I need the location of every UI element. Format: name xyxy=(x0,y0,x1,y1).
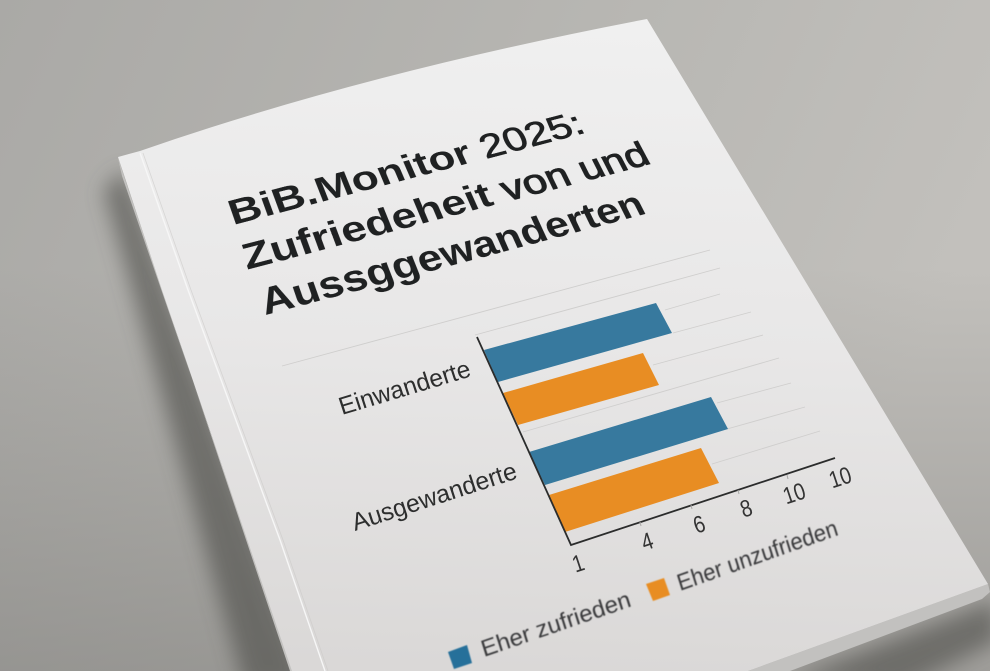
legend text: Eher zufrieden: Eher zufrieden xyxy=(478,585,634,662)
bar: Einwanderte eher unzufrieden xyxy=(503,353,659,425)
x axis tick labels: 4 xyxy=(638,527,657,556)
chart xyxy=(282,250,855,578)
x axis tick marks xyxy=(640,475,788,526)
title: BiB.Monitor 2025: xyxy=(219,109,602,225)
legend swatch: blue xyxy=(448,645,472,669)
x axis tick labels: 10 xyxy=(825,461,855,494)
title: Aussggewanderten xyxy=(241,184,640,301)
legend text: Eher unzufrieden: Eher unzufrieden xyxy=(674,514,841,596)
title: Zufriedeheit von und xyxy=(228,138,660,264)
x axis tick labels: 6 xyxy=(690,510,709,539)
booklet thickness xyxy=(118,158,990,671)
grid lines xyxy=(282,250,820,464)
legend swatch: orange xyxy=(646,578,670,601)
x axis tick labels: 10 xyxy=(779,477,809,510)
booklet shadow left xyxy=(104,170,310,671)
x axis tick labels: 1 xyxy=(569,549,588,578)
x axis tick labels xyxy=(569,461,855,578)
label: Einwanderte: Einwanderte xyxy=(335,355,474,420)
label: Ausgewanderte: Ausgewanderte xyxy=(348,457,520,536)
x axis tick labels: 8 xyxy=(737,494,756,523)
spine crease xyxy=(140,153,325,671)
title xyxy=(219,109,660,315)
booklet shadow bottom xyxy=(790,600,990,671)
bar: Einwanderte eher zufrieden xyxy=(484,303,672,382)
legend xyxy=(448,514,841,669)
bar: Ausgewanderte eher zufrieden xyxy=(529,397,728,485)
axes xyxy=(477,337,835,545)
bar: Ausgewanderte eher unzufrieden xyxy=(549,448,719,532)
